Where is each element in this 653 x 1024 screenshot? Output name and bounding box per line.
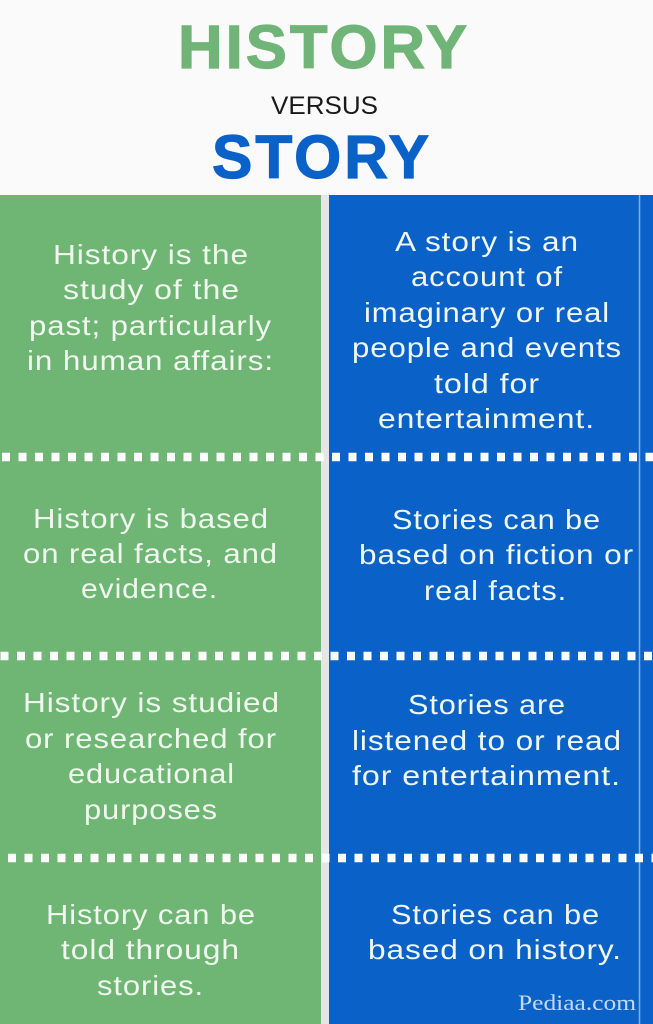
- text: story purpose: for entertainment.: [352, 760, 621, 791]
- text: history purpose: purposes: [84, 794, 218, 825]
- text: history purpose: [23, 687, 280, 825]
- text: story purpose: listened to or read: [352, 725, 622, 756]
- watermark: Pediaa.com: Pediaa.com: [518, 990, 636, 1015]
- text: story definition: [352, 226, 622, 434]
- text: story definition: people and events: [352, 332, 622, 363]
- text: history purpose: History is studied: [23, 687, 280, 718]
- text: story definition: entertainment.: [378, 403, 595, 434]
- text: story relation: [368, 899, 622, 965]
- text: story definition: A story is an: [395, 226, 579, 257]
- text: story basis: [359, 504, 634, 606]
- text: history definition: past; particularly: [29, 310, 272, 341]
- text: story definition: imaginary or real: [364, 297, 610, 328]
- title: History: HISTORY: [178, 13, 470, 81]
- text: story basis: real facts.: [424, 575, 567, 606]
- text: story purpose: [352, 689, 622, 791]
- panel: history column: [0, 195, 321, 1024]
- text: history telling: stories.: [97, 970, 204, 1001]
- text: history definition: [27, 239, 274, 376]
- text: story definition: account of: [411, 261, 563, 292]
- text: history basis: on real facts, and: [23, 538, 278, 569]
- text: history definition: History is the: [53, 239, 249, 270]
- text: history definition: study of the: [63, 274, 240, 305]
- text: history telling: told through: [61, 934, 240, 965]
- text: story relation: based on history.: [368, 934, 622, 965]
- text: story basis: based on fiction or: [359, 539, 634, 570]
- panel: story column: [329, 195, 653, 1024]
- text: history definition: in human affairs:: [27, 345, 274, 376]
- text: story purpose: Stories are: [408, 689, 566, 720]
- text: story basis: Stories can be: [392, 504, 601, 535]
- text: history basis: [23, 503, 278, 604]
- subtitle: versus: VERSUS: [271, 92, 378, 120]
- text: story definition: told for: [434, 368, 540, 399]
- text: history basis: evidence.: [81, 573, 218, 604]
- text: history telling: History can be: [46, 899, 256, 930]
- text: history telling: [46, 899, 256, 1001]
- title: Story: STORY: [212, 123, 432, 191]
- text: history basis: History is based: [33, 503, 269, 534]
- text: history purpose: or researched for: [25, 723, 277, 754]
- text: history purpose: educational: [68, 758, 235, 789]
- text: story relation: Stories can be: [391, 899, 600, 930]
